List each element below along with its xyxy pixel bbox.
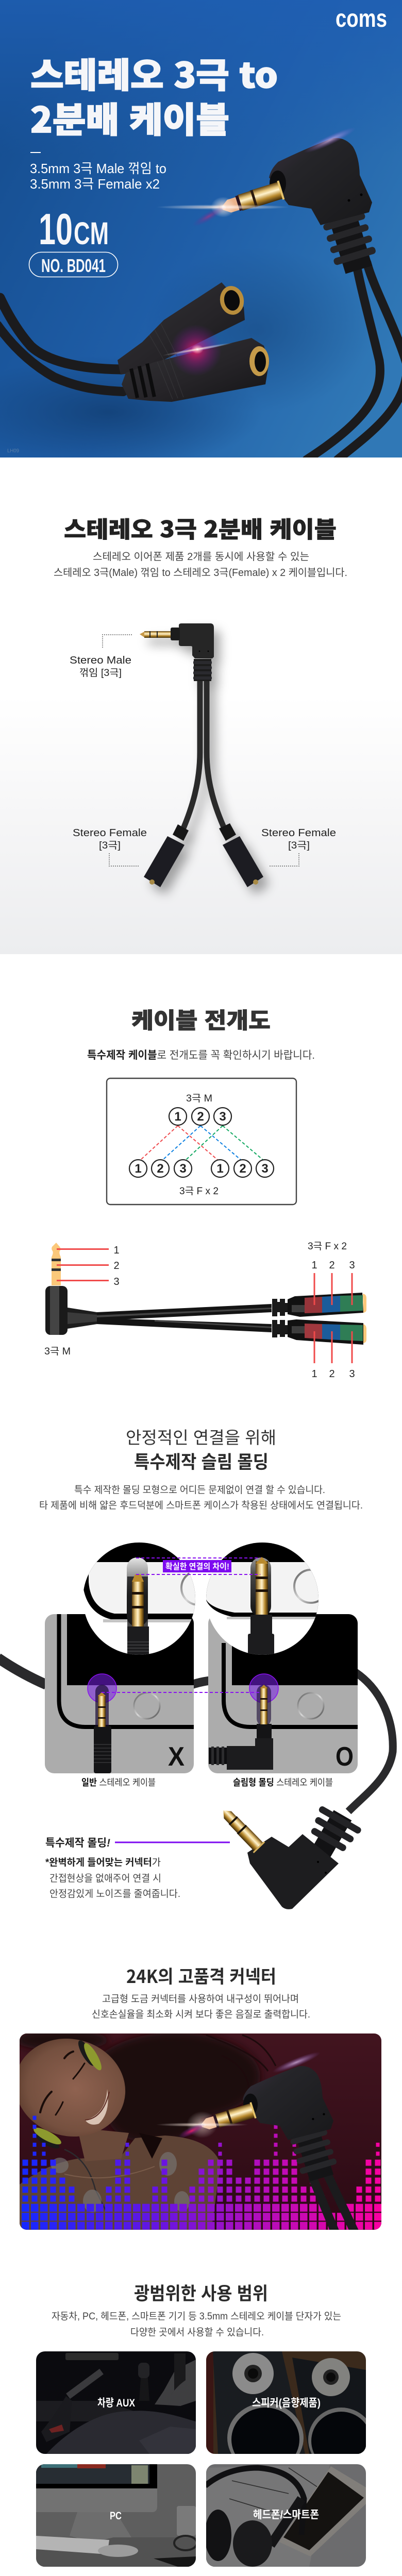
callout: molding: 안정감있게 노이즈를 줄여줍니다. xyxy=(49,1888,180,1900)
panel: product overview xyxy=(0,457,402,954)
subtitle: 3.5mm 3극 Female x2 xyxy=(30,176,160,192)
title xyxy=(31,58,277,137)
heading: 24K의 고품격 커넥터 xyxy=(126,1962,276,1989)
title: 2분배 케이블 xyxy=(30,92,229,143)
pinout box: 2 xyxy=(197,1110,204,1124)
connector illustration: 1 xyxy=(311,1260,317,1271)
card: car AUX xyxy=(36,2351,196,2454)
connector illustration: 3 xyxy=(349,1368,355,1380)
label: stereo male: 꺾임 [3극] xyxy=(79,667,122,679)
heading xyxy=(126,1428,276,1474)
product: female connectors xyxy=(118,282,269,402)
product photo: Y cable xyxy=(140,623,263,887)
comparison markers xyxy=(102,1558,261,1692)
description xyxy=(39,1484,363,1511)
product: cables xyxy=(0,263,402,460)
heading: 케이블 전개도 xyxy=(131,1003,271,1035)
pinout box: 1 xyxy=(216,1162,224,1176)
card: speakers xyxy=(206,2351,366,2454)
product: jack xyxy=(199,2066,340,2183)
phone: regular cable xyxy=(45,1614,194,1773)
captions: 슬림형 몰딩 스테레오 케이블 xyxy=(233,1777,333,1788)
magnifier: regular cable xyxy=(83,1543,195,1655)
panel: 24K connector xyxy=(4,1962,381,2232)
description: 다양한 곳에서 사용할 수 있습니다. xyxy=(130,2327,264,2338)
pinout box: 3 xyxy=(179,1162,187,1176)
connector illustration: 2 xyxy=(329,1368,335,1380)
description: 자동차, PC, 헤드폰, 스마트폰 기기 등 3.5mm 스테레오 케이블 단자가 있는 xyxy=(52,2311,341,2322)
description: 신호손실율을 최소화 시켜 보다 좋은 음질로 출력합니다. xyxy=(92,2009,310,2020)
title: 스테레오 3극 to xyxy=(30,48,278,98)
product: angled male jack xyxy=(220,138,380,276)
pinout box: 3 xyxy=(261,1162,269,1176)
label: stereo female left: [3극] xyxy=(99,840,121,851)
callout: molding: *완벽하게 들어맞는 커넥터가 xyxy=(45,1857,161,1868)
description: 스테레오 이어폰 제품 2개를 동시에 사용할 수 있는 xyxy=(93,551,309,563)
description: 타 제품에 비해 얇은 후드덕분에 스마트폰 케이스가 착용된 상태에서도 연결됩니다. xyxy=(39,1500,363,1511)
mark X: X xyxy=(168,1742,185,1772)
model badge: NO. BD041 xyxy=(41,255,106,276)
connector illustration: 2 xyxy=(113,1260,120,1272)
connector illustration: 3 xyxy=(349,1260,355,1271)
panel: slim molding xyxy=(0,1428,393,1909)
panel: usage range xyxy=(36,2279,374,2567)
length label: 10 xyxy=(39,205,73,254)
connector illustration: 1 xyxy=(311,1368,317,1380)
description xyxy=(54,551,347,579)
description xyxy=(92,1993,310,2020)
length label xyxy=(40,213,107,245)
pinout box xyxy=(107,1078,296,1205)
label: 헤드폰/스마트폰 xyxy=(253,2509,319,2521)
brand logo: coms xyxy=(336,5,387,32)
subtitle xyxy=(30,152,166,192)
cable behind phones xyxy=(0,1658,393,1811)
pinout box: 3 xyxy=(219,1110,226,1124)
pinout box: 1 xyxy=(174,1110,181,1124)
pinout box: 2 xyxy=(239,1162,246,1176)
label: 차량 AUX xyxy=(97,2397,135,2409)
description: 특수 제작한 몰딩 모형으로 어디든 문제없이 연결 할 수 있습니다. xyxy=(74,1484,325,1496)
connector illustration: 3 xyxy=(113,1276,120,1287)
pinout box: 3극 M xyxy=(186,1093,212,1104)
description: 특수제작 케이블로 전개도를 꼭 확인하시기 바랍니다. xyxy=(87,1049,315,1061)
heading: 광범위한 사용 범위 xyxy=(134,2279,268,2306)
label: stereo male xyxy=(70,635,132,679)
pinout box: 3극 F x 2 xyxy=(179,1186,219,1197)
subtitle: 3.5mm 3극 Male 꺾임 to xyxy=(30,161,166,176)
image code: LH09 xyxy=(7,448,19,454)
label: 스피커(음향제품) xyxy=(252,2397,321,2409)
captions: 일반 스테레오 케이블 xyxy=(81,1777,156,1788)
photo: woman with headphones xyxy=(4,2026,381,2232)
magnifier: slim molding xyxy=(206,1543,319,1655)
label: stereo female right: [3극] xyxy=(288,840,310,851)
model badge xyxy=(29,252,118,277)
label: stereo male: Stereo Male xyxy=(70,655,131,666)
connector illustration xyxy=(44,1241,366,1380)
label: stereo female left xyxy=(73,827,147,866)
label: stereo female left: Stereo Female xyxy=(73,827,147,839)
callout: molding: 간접현상을 없애주어 연결 시 xyxy=(49,1873,161,1884)
pinout box: 1 xyxy=(135,1162,142,1176)
comparison markers: 확실한 연결의 차이! xyxy=(165,1562,229,1571)
mark O: O xyxy=(336,1742,354,1772)
card: PC xyxy=(36,2464,197,2567)
heading: 특수제작 슬림 몰딩 xyxy=(134,1448,269,1474)
description xyxy=(52,2311,341,2338)
label: stereo female right: Stereo Female xyxy=(261,827,336,839)
flare xyxy=(158,2053,319,2138)
callout: molding: 특수제작 몰딩! xyxy=(45,1837,110,1849)
connector illustration: 1 xyxy=(113,1245,120,1256)
card: headphones and smartphone xyxy=(205,2464,366,2567)
pinout box: 2 xyxy=(157,1162,164,1176)
panel: hero header xyxy=(0,0,402,469)
panel: wiring diagram xyxy=(44,1003,366,1380)
connector illustration: 3극 F x 2 xyxy=(308,1241,347,1252)
product: molded jack xyxy=(218,1803,363,1909)
product: cables xyxy=(312,2175,355,2232)
length label: CM xyxy=(74,216,109,251)
connector illustration: 3극 M xyxy=(44,1346,71,1357)
heading: 안정적인 연결을 위해 xyxy=(126,1428,276,1447)
description: 스테레오 3극(Male) 꺾임 to 스테레오 3극(Female) x 2 케이블입니다. xyxy=(54,567,347,579)
label: PC xyxy=(110,2510,122,2522)
phone: slim molding cable xyxy=(208,1614,358,1773)
equalizer bars xyxy=(20,2107,381,2231)
description: 고급형 도금 커넥터를 사용하여 내구성이 뛰어나며 xyxy=(102,1993,299,2005)
connector illustration: 2 xyxy=(329,1260,335,1271)
captions xyxy=(81,1777,333,1788)
heading: 스테레오 3극 2분배 케이블 xyxy=(64,511,337,544)
label: stereo female right xyxy=(261,827,336,866)
light flare on jack xyxy=(159,129,353,225)
callout: molding xyxy=(45,1837,230,1900)
